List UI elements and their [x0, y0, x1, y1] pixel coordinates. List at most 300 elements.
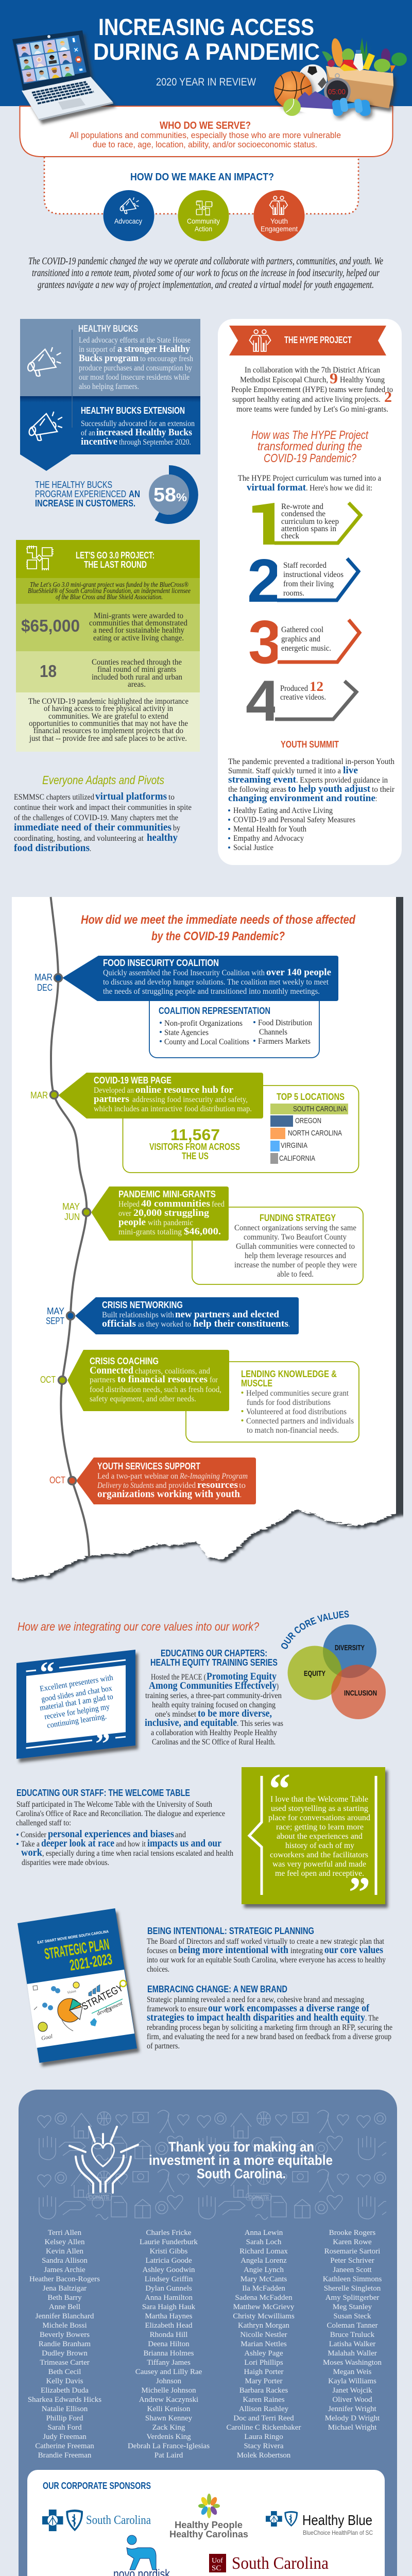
list: donors column 1: Michele Bossi	[42, 2321, 87, 2330]
node: may to june	[62, 1201, 91, 1222]
list: donors column 2: Verdenis King	[146, 2433, 191, 2441]
list: donors column 3: Matthew McGrievy	[233, 2303, 295, 2311]
chart: top 5 locations: CALIFORNIA	[279, 1154, 315, 1163]
text: being intentional: being more intentional with	[178, 1944, 288, 1956]
box: funding strategy: increase the number of people they were	[234, 1261, 357, 1269]
callout text: mini-grants: people	[118, 1217, 146, 1228]
text: embracing change: Strategic planning revealed a need for a new, cohesive brand and messaging	[147, 1995, 364, 2004]
list: donors column 2: Causey and Lilly Rae	[135, 2368, 202, 2376]
text: educating our chapters: training series, a three-part community-driven	[145, 1691, 282, 1700]
list: donors column 2: Zack King	[152, 2424, 185, 2432]
panel: how do we make an impact	[44, 158, 358, 241]
node: march to december: DEC	[37, 982, 53, 993]
list: summit topics: Empathy and Advocacy	[233, 834, 304, 843]
list: donors column 4: Kayla Williams	[328, 2377, 376, 2385]
callout text: web page: Developed an	[94, 1086, 134, 1095]
text: everyone adapts body	[14, 791, 192, 854]
list: donors column 2: Michelle Johnson	[141, 2386, 196, 2395]
text: hype description: Methodist Episcopal Church,	[240, 376, 328, 384]
title	[93, 14, 320, 65]
box: lending knowledge and muscle: Volunteered at food distributions	[246, 1408, 347, 1416]
callout text: youth services: Re-Imagining Program	[179, 1472, 248, 1481]
list: summit topics: Mental Health for Youth	[233, 825, 306, 834]
list: donors column 2: Latricia Goode	[145, 2257, 192, 2265]
logo: healthy blue	[266, 2511, 373, 2536]
text: funding note: The Let's Go 3.0 mini-grant project was funded by the BlueCross®	[30, 581, 188, 588]
panel: thank you donors: DONATE	[249, 2194, 269, 2201]
node: october: OCT	[40, 1375, 56, 1385]
list: donors column 3: Lori Phillips	[244, 2359, 283, 2367]
list: donors column 1	[28, 2229, 101, 2460]
icon: joined hands	[26, 546, 54, 570]
text: physical activity note: The COVID-19 pandemic highlighted the importance	[28, 697, 188, 706]
heading: let's go	[76, 550, 154, 570]
callout text: mini-grants: feed	[212, 1200, 225, 1209]
text: physical activity note: communities. We are grateful to extend	[48, 712, 168, 721]
list: donors column 3: Sarah Loch	[246, 2238, 282, 2246]
callout: mini-grants	[91, 1187, 229, 1241]
text: youth summit body: changing environment and routine	[228, 793, 375, 804]
text: educating our chapters: Among Communities Effectively	[149, 1680, 277, 1691]
text: educating our staff: Consider	[21, 1831, 47, 1839]
list: donors column 1: Brandie Freeman	[38, 2451, 92, 2460]
box: lending knowledge and muscle: Helped communities secure grant	[246, 1389, 349, 1398]
text: being intentional: our core values	[324, 1944, 383, 1956]
list: donors column 2	[128, 2229, 210, 2460]
text: healthy bucks body: to encourage fresh	[140, 354, 193, 363]
list: donors column 1: Jennifer Blanchard	[36, 2312, 94, 2320]
list: donors column 4: Janeen Scott	[333, 2266, 372, 2274]
text: customer increase: PROGRAM EXPERIENCED	[35, 489, 126, 499]
text: hype description: People Empowerement (HYPE) teams were funded to	[231, 385, 393, 394]
node: march to december: MAR	[35, 972, 53, 982]
callout text: coalition: FOOD INSECURITY COALITION	[103, 958, 219, 968]
box: funding strategy: help them leverage resources and	[245, 1251, 346, 1260]
box: funding strategy	[192, 1207, 363, 1284]
text: educating our chapters: HEALTH EQUITY TRAINING SERIES	[150, 1657, 278, 1668]
box: funding strategy: Gullah communities were connected to	[236, 1242, 355, 1251]
logo: university of south carolina: SC	[212, 2564, 221, 2572]
subtitle: 2020 YEAR IN REVIEW	[156, 76, 256, 88]
text: customer increase: THE HEALTHY BUCKS	[35, 480, 112, 490]
icon: megaphone	[27, 347, 61, 376]
list: donors column 2: Andrew Kaczynski	[139, 2396, 198, 2404]
box: visitors and top locations: 11,567	[170, 1126, 220, 1144]
text: virtual format: . Here's how we did it:	[306, 484, 372, 493]
stat: 18 counties: Counties reached through the	[92, 658, 182, 667]
callout text: crisis networking: help their constituents	[193, 1318, 288, 1329]
circle: community action: Community	[187, 217, 220, 225]
chart: core values venn: INCLUSION	[344, 1689, 377, 1698]
text: educating our staff: and how it	[116, 1840, 146, 1849]
circle: youth engagement	[253, 190, 305, 241]
callout text: mini-grants: over	[118, 1209, 132, 1218]
text: physical activity note: opportunities to communities that may not have the	[29, 719, 188, 728]
callout text: coalition: the needs of struggling people and transitioned into monthly meetings.	[103, 987, 320, 996]
step 3	[248, 608, 359, 676]
list: donors column 3: Angie Lynch	[244, 2266, 284, 2274]
list: donors column 1: Sarah Ford	[47, 2424, 82, 2432]
text: being intentional: choices.	[147, 1965, 169, 1974]
text: educating our chapters: inclusive, and equitable	[145, 1717, 237, 1728]
text: educating our staff: , especially during a time when racial tensions escalated and health	[42, 1849, 233, 1858]
panel: let's go project	[16, 540, 200, 752]
chart: 58 percent donut	[149, 465, 198, 524]
callout text: crisis coaching: food distribution needs, such as fresh food,	[90, 1385, 221, 1394]
text: healthy bucks body: Bucks program	[79, 353, 139, 364]
text: healthy bucks body	[79, 336, 193, 391]
timeline item: pandemic mini-grants	[62, 1187, 363, 1284]
callout: crisis coaching	[67, 1350, 229, 1411]
list: donors column 2: Ashley Goodwin	[142, 2266, 195, 2274]
box: lending knowledge and muscle: Connected partners and individuals	[246, 1417, 354, 1426]
text: everyone adapts body: coordinating, hosting, and volunteering at	[14, 834, 144, 843]
callout text: crisis networking: new partners and elected	[175, 1309, 279, 1320]
text: being intentional	[147, 1926, 386, 1974]
step 2: Staff recorded	[283, 561, 327, 570]
heading: let's go: LET'S GO 3.0 PROJECT:	[76, 550, 154, 561]
list: donors column 1: Kevin Allen	[46, 2247, 83, 2256]
list: donors column 4: Karen Rowe	[333, 2238, 372, 2246]
text: being intentional: into our work for an equitable South Carolina, where everyone has access to healthy	[147, 1956, 386, 1964]
circle: community action	[178, 190, 229, 241]
callout text: crisis coaching: to financial resources	[117, 1374, 208, 1385]
list: donors column 4: Malahah Waller	[328, 2349, 377, 2358]
text: virtual format	[238, 474, 381, 493]
callout text: crisis networking: officials	[102, 1318, 136, 1329]
quote: excellent presenters	[16, 1650, 135, 1760]
text: extension body: increased Healthy Bucks	[96, 427, 192, 438]
list: donors column 3: Richard Lomax	[239, 2247, 288, 2256]
list: donors column 2: Anna Hamilton	[145, 2294, 193, 2302]
callout text: mini-grants: mini-grants totaling	[118, 1228, 182, 1236]
list: donors column 2: Kristi Gibbs	[150, 2247, 188, 2256]
list: donors column 1: Beverly Bowers	[40, 2331, 90, 2339]
text: youth summit body: live	[343, 765, 358, 776]
text: educating our chapters: a collaboration with Healthy People Healthy	[151, 1728, 277, 1737]
text: everyone adapts body: .	[90, 844, 91, 853]
panel: healthy bucks	[20, 319, 200, 471]
list: donors column 2: Kelli Kenison	[147, 2405, 191, 2413]
step 2: 2	[247, 547, 281, 615]
callout text: mini-grants: PANDEMIC MINI-GRANTS	[118, 1189, 216, 1199]
callout text: crisis coaching: CRISIS COACHING	[90, 1356, 159, 1366]
circle: advocacy: Advocacy	[114, 217, 142, 225]
text: extension body: through September 2020.	[119, 438, 191, 447]
quote: welcome table: used storytelling as a starting	[271, 1804, 368, 1813]
box: coalition representation: Channels	[259, 1028, 287, 1037]
list: donors column 3: Laura Ringo	[244, 2433, 283, 2441]
list: donors column 4: Coleman Tanner	[327, 2321, 378, 2330]
callout: coalition	[62, 956, 338, 1001]
list: donors column 2: Pat Laird	[154, 2451, 183, 2460]
quote: welcome table: I love that the Welcome Table	[270, 1795, 368, 1804]
quote: excellent presenters: Excellent presenters with	[39, 1673, 114, 1693]
stat: 65000: eating or active living change.	[93, 634, 184, 642]
text: youth summit body: streaming event	[228, 774, 297, 785]
title: DURING A PANDEMIC	[93, 39, 320, 65]
list: donors column 4: Sherelle Singleton	[324, 2284, 381, 2293]
box: coalition representation	[149, 979, 319, 1058]
chart: top 5 locations	[270, 1092, 348, 1164]
callout text: youth services: Delivery to Students	[97, 1481, 154, 1490]
logo: bluecross south carolina: South Carolina	[86, 2514, 151, 2527]
callout text: mini-grants: 40 communities	[141, 1198, 210, 1209]
text: hype description: more teams were funded by Let's Go mini-grants.	[236, 405, 388, 414]
box: funding strategy: community. Two Beaufort County	[244, 1233, 347, 1242]
logo: healthy blue: Healthy Blue	[302, 2512, 372, 2528]
title: INCREASING ACCESS	[98, 14, 314, 40]
text: hype description: 2	[384, 389, 392, 405]
list: donors column 1: Sandra Allison	[42, 2257, 88, 2265]
list: donors column 2: Debrah La France-Iglesias	[128, 2442, 210, 2450]
callout text: web page: COVID-19 WEB PAGE	[94, 1075, 171, 1086]
list: donors column 4: Susan Steck	[334, 2312, 371, 2320]
text: physical activity note: financial resources to implement projects that do	[33, 726, 183, 735]
panel: the hype project	[218, 319, 402, 865]
chart: top 5 locations: NORTH CAROLINA	[288, 1129, 342, 1138]
stat: 18 counties: 18	[40, 662, 57, 681]
callout text: youth services: .	[240, 1490, 242, 1499]
text: physical activity note	[28, 697, 188, 743]
node: may to september	[46, 1306, 74, 1326]
list: donors column 3: Haigh Porter	[244, 2368, 284, 2376]
quote: excellent presenters: “	[40, 1655, 55, 1689]
quote: excellent presenters: ”	[95, 1727, 110, 1760]
list: summit topics: Healthy Eating and Active Living	[233, 806, 333, 815]
list: donors column 3: Mary McCants	[241, 2275, 287, 2283]
list: donors column 4: Jennifer Wright	[328, 2405, 377, 2413]
list: donors column 1: Judy Freeman	[43, 2433, 87, 2441]
list: donors column 3	[227, 2229, 301, 2460]
list: donors column 4: Megan Weis	[333, 2368, 372, 2376]
list: donors column 4: Amy Splittgerber	[325, 2294, 379, 2302]
list: donors column 2: Johnson	[156, 2377, 182, 2385]
list: donors column 4: Oliver Wood	[332, 2396, 372, 2404]
list: donors column 2: Elizabeth Head	[145, 2321, 193, 2330]
list: donors column 4: Moses Washington	[323, 2359, 382, 2367]
illustration: strategic plan booklet: Goal	[41, 2033, 53, 2042]
timeline item: youth services support	[49, 1458, 256, 1504]
step 1: attention spans in	[281, 524, 336, 533]
callout text: youth services: to	[239, 1481, 246, 1490]
logo: bluecross south carolina	[42, 2510, 151, 2531]
panel: healthy bucks extension	[20, 396, 200, 471]
callout text: youth services: resources	[197, 1480, 238, 1490]
stat: 65000: communities that demonstrated	[89, 619, 187, 628]
list: donors column 1: Trimease Carter	[40, 2359, 90, 2367]
list: donors column 4: Latisha Walker	[329, 2340, 375, 2348]
list: donors column 2: Laurie Funderburk	[140, 2238, 198, 2246]
node: may to september: MAY	[47, 1306, 64, 1316]
text: embracing change: our work encompasses a diverse range of	[208, 2003, 369, 2014]
circle: youth engagement: Engagement	[261, 225, 298, 233]
illustration: strategic plan booklet: STRATEGY	[80, 1982, 125, 2012]
list: donors column 2: Deena Hilton	[148, 2340, 190, 2348]
list: donors column 3: Kathryn Morgan	[238, 2321, 290, 2330]
list: donors column 1: Kelly Davis	[46, 2377, 83, 2385]
heading: immediate needs	[81, 913, 356, 943]
step 3: 3	[248, 608, 282, 676]
list: donors column 4: Bruce Truluck	[330, 2331, 375, 2339]
text: educating our staff: Take a	[21, 1840, 40, 1849]
chart: core values venn: OUR CORE VALUES	[281, 1611, 349, 1649]
callout text: crisis coaching: chapters, coalitions, and	[135, 1367, 210, 1376]
list: donors column 4: Meg Stanley	[333, 2303, 372, 2311]
panel: torn paper timeline background	[0, 886, 409, 1582]
logo: university of south carolina: South Carolina	[232, 2554, 329, 2573]
list: donors column 2: Martha Haynes	[145, 2312, 193, 2320]
list: summit topics: COVID-19 and Personal Safety Measures	[233, 816, 355, 824]
list: donors column 4: Kathleen Simmons	[323, 2275, 382, 2283]
node: march to december	[35, 972, 62, 993]
timeline item: crisis coaching	[40, 1350, 359, 1442]
text: youth summit body: to help youth adjust	[288, 784, 371, 794]
text: hype description: Healthy Young	[340, 376, 385, 384]
list: donors column 3: Nicolle Nestler	[240, 2331, 287, 2339]
list: donors column 3: Marian Nettles	[241, 2340, 287, 2348]
text: virtual format: The HYPE Project curriculum was turned into a	[238, 474, 381, 483]
step 1: Re-wrote and	[281, 502, 323, 511]
callout text: crisis coaching: safety equipment, and other needs.	[90, 1395, 196, 1403]
step 3: graphics and	[281, 635, 320, 643]
callout text: crisis coaching: for	[210, 1376, 218, 1384]
stat: 18 counties: areas.	[128, 680, 146, 689]
text: educating our chapters: )	[277, 1682, 279, 1691]
text: extension body: of an	[81, 429, 95, 437]
step 2: rooms.	[283, 589, 304, 598]
stat: 65000: a need for sustainable healthy	[93, 626, 184, 635]
list: donors column 4: Janet Wojcik	[332, 2386, 372, 2395]
header band	[0, 0, 412, 106]
list: donors column 1: Heather Bacon-Rogers	[29, 2275, 100, 2283]
callout: youth services	[76, 1458, 256, 1504]
text: youth summit body: the following areas	[228, 785, 286, 794]
callout text: web page: addressing food insecurity and safety,	[132, 1095, 248, 1104]
list: donors column 1: Sharkea Edwards Hicks	[28, 2396, 101, 2404]
text: educating our chapters: to be more diverse,	[198, 1708, 272, 1719]
logo: healthy people healthy carolinas: Healthy Carolinas	[169, 2529, 248, 2539]
text: being intentional: focuses on	[147, 1946, 177, 1955]
text: healthy bucks body: our most food insecure residents while	[79, 373, 190, 382]
step 1: curriculum to keep	[281, 517, 339, 526]
heading: who do we serve: WHO DO WE SERVE?	[160, 120, 251, 131]
text: educating our staff: work	[21, 1847, 43, 1858]
step 4: 4	[246, 669, 280, 733]
text: populations served: due to race, age, location, ability, and/or socioeconomic status.	[93, 140, 317, 149]
step 3: Gathered cool	[281, 625, 323, 634]
illustration: strategic plan booklet: Vision	[67, 1989, 77, 1995]
text: embracing change: rebranding process began by soliciting a marketing firm through an RFP, securing the	[147, 2023, 392, 2032]
list: donors column 3: Anna Lewin	[245, 2229, 283, 2237]
illustration: strategic plan booklet: 2021-2023	[68, 1951, 113, 1974]
text: being intentional: BEING INTENTIONAL: STRATEGIC PLANNING	[147, 1926, 314, 1936]
text: everyone adapts body: of the challenges of COVID-19. Many chapters met the	[14, 814, 178, 822]
list: donors column 4: Brooke Rogers	[329, 2229, 375, 2237]
illustration: strategic plan booklet: STRATEGIC PLAN	[43, 1936, 111, 1963]
text: educating our chapters: . This series was	[237, 1719, 283, 1728]
callout text: web page: which includes an interactive food distribution map.	[94, 1105, 252, 1113]
heading: everyone adapts: Everyone Adapts and Pivots	[42, 773, 164, 787]
stat: 65000	[21, 612, 187, 642]
text: everyone adapts body: continue their work and impact their communities in spite	[14, 803, 192, 812]
box: visitors and top locations: VISITORS FROM ACROSS	[149, 1142, 240, 1152]
step 4: 12	[310, 679, 323, 694]
callout text: crisis coaching: partners	[90, 1376, 115, 1384]
illustration: laptop with video call	[12, 30, 113, 121]
text: educating our chapters	[145, 1648, 283, 1747]
step 4: Produced	[280, 684, 308, 693]
heading: core values: How are we integrating our core values into our work?	[18, 1620, 259, 1633]
text: educating our chapters: EDUCATING OUR CHAPTERS:	[161, 1648, 267, 1658]
step 2: instructional videos	[283, 570, 344, 579]
heading: impact: HOW DO WE MAKE AN IMPACT?	[130, 172, 274, 183]
callout text: crisis coaching	[90, 1356, 221, 1403]
list: summit topics	[228, 806, 355, 852]
circle: advocacy	[103, 190, 154, 241]
chart: 58 percent donut: %	[176, 491, 187, 504]
list: donors column 3: Caroline C Rickenbaker	[227, 2424, 301, 2432]
illustration: food box and sports equipment	[274, 38, 407, 116]
quote: welcome table: coworkers and the facilitators	[270, 1851, 368, 1859]
heading: how was hype transformed: transformed during the	[258, 439, 362, 453]
text: educating our staff: deeper look at race	[41, 1838, 114, 1849]
chart: top 5 locations: TOP 5 LOCATIONS	[277, 1092, 345, 1102]
text: embracing change	[147, 1984, 392, 2050]
box: visitors and top locations	[123, 1086, 358, 1173]
box: funding strategy: Connect organizations serving the same	[234, 1224, 356, 1232]
text: educating our staff: Carolina's Office of Race and Reconciliation. The dialogue and experience	[16, 1809, 225, 1818]
text: everyone adapts body: healthy	[147, 832, 178, 843]
callout text: youth services: organizations working with youth	[97, 1488, 240, 1500]
list: donors column 1: Natalie Ellison	[42, 2405, 88, 2413]
list: donors column 1: Kelsey Allen	[45, 2238, 85, 2246]
quote: welcome table: was very powerful and made	[272, 1860, 366, 1869]
callout text: crisis networking: as they worked to	[138, 1320, 191, 1329]
text: embracing change: . The	[365, 2014, 379, 2023]
text: being intentional: The Board of Directors and staff worked virtually to create a new strategic plan that	[147, 1937, 385, 1946]
heading: how was hype transformed	[251, 428, 369, 465]
chart: top 5 locations: SOUTH CAROLINA	[293, 1105, 347, 1113]
text: youth summit body: . Experts provided guidance in	[296, 776, 388, 785]
quote: welcome table: “	[269, 1765, 290, 1813]
text: customer increase	[35, 480, 140, 509]
step 1: check	[281, 532, 299, 540]
illustration: food box and sports equipment: 05:00	[328, 88, 346, 96]
list: donors column 1: Dudley Brown	[42, 2349, 88, 2358]
text: funding note	[28, 581, 191, 601]
callout text: crisis networking: Built relationships with	[102, 1311, 174, 1319]
stat: 65000: Mini-grants were awarded to	[94, 612, 183, 620]
box: coalition representation: Non-profit Organizations	[164, 1019, 243, 1028]
illustration: strategic plan booklet: EAT SMART MOVE MORE SOUTH CAROLINA	[37, 1929, 109, 1945]
text: educating our staff: and	[175, 1831, 186, 1839]
quote: welcome table: ”	[349, 1869, 370, 1917]
list: donors column 2: Charles Fricke	[146, 2229, 192, 2237]
chart: top 5 locations: OREGON	[295, 1116, 321, 1125]
icon: hands holding heart	[70, 2127, 138, 2193]
text: educating our staff: EDUCATING OUR STAFF: THE WELCOME TABLE	[16, 1788, 190, 1798]
list: donors column 2: Shawn Kenney	[145, 2414, 193, 2422]
box: coalition representation: Farmers Markets	[258, 1037, 311, 1046]
callout text: crisis networking	[102, 1300, 290, 1329]
list: donors column 4: Melody D Wright	[325, 2414, 380, 2422]
banner: hype project: THE HYPE PROJECT	[284, 335, 352, 345]
callout: crisis networking	[75, 1297, 299, 1334]
callout text: crisis networking: CRISIS NETWORKING	[102, 1300, 183, 1310]
box: lending knowledge and muscle: MUSCLE	[241, 1378, 272, 1388]
list: donors column 4: Peter Schriver	[330, 2257, 374, 2265]
